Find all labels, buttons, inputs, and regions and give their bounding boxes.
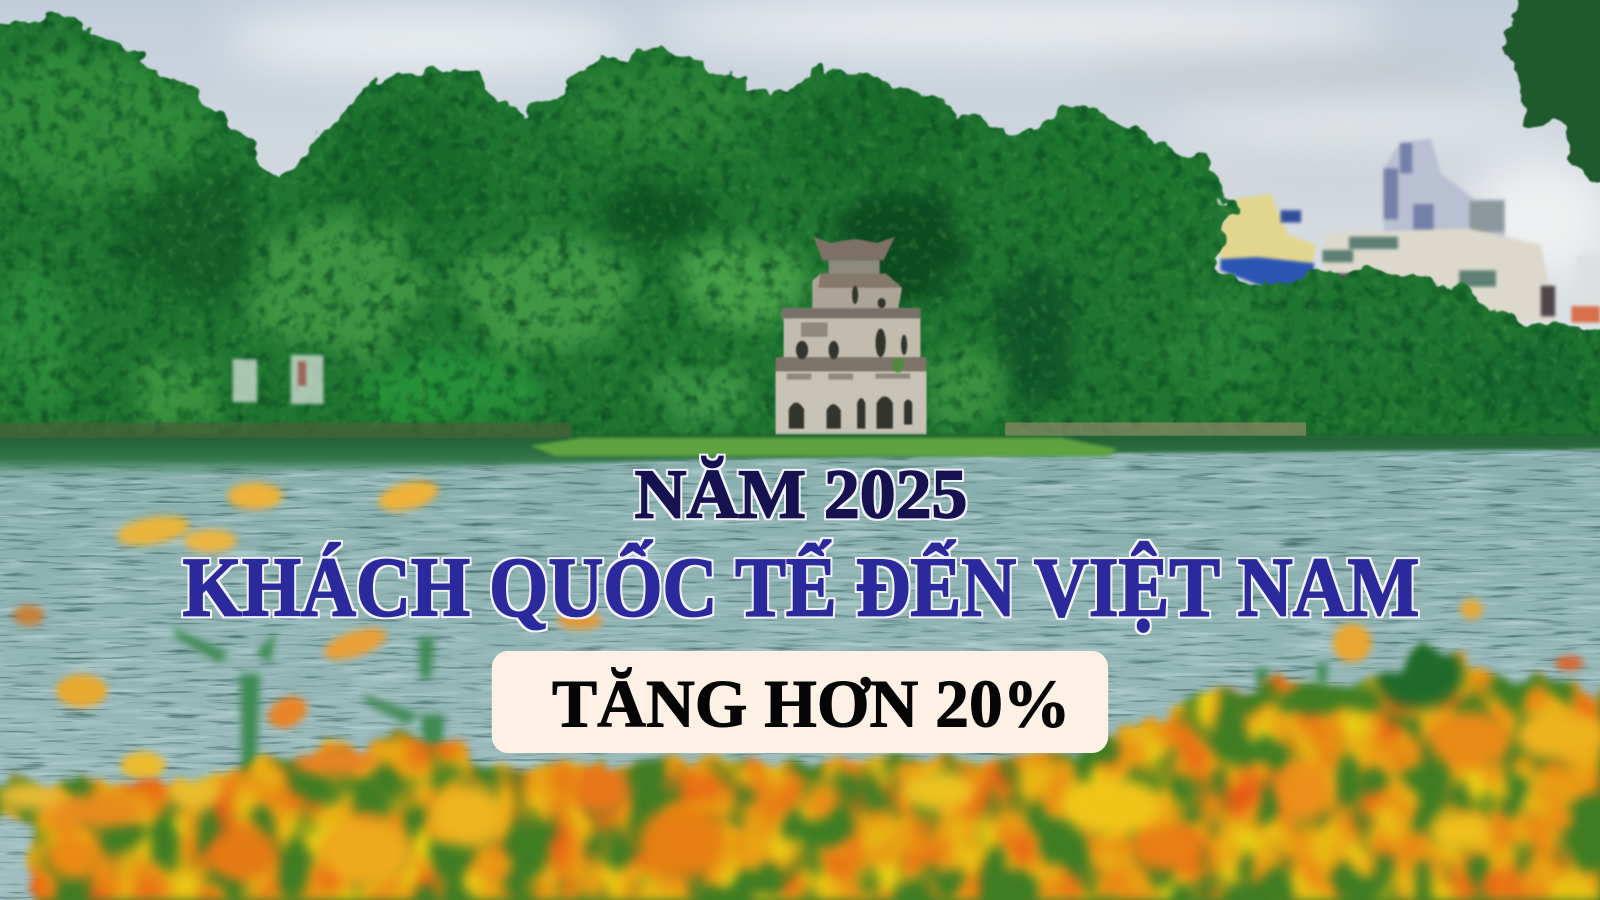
top-right foreground tree bbox=[1502, 0, 1600, 219]
heading line 2: KHÁCH QUỐC TẾ ĐẾN VIỆT NAM bbox=[183, 539, 1419, 634]
heading line 1: NĂM 2025 bbox=[635, 456, 967, 533]
callout text: TĂNG HƠN 20% bbox=[552, 667, 1070, 742]
tree line along the shore bbox=[0, 10, 1600, 437]
city buildings bbox=[1220, 139, 1600, 322]
blurred flowers floating over the water bbox=[13, 476, 1584, 779]
sky with clouds bbox=[0, 0, 1600, 449]
flower bed in the foreground bbox=[0, 636, 1600, 900]
callout pill: increase over 20% bbox=[492, 651, 1108, 753]
lake water bbox=[0, 422, 1600, 900]
Turtle Tower bbox=[776, 237, 927, 435]
